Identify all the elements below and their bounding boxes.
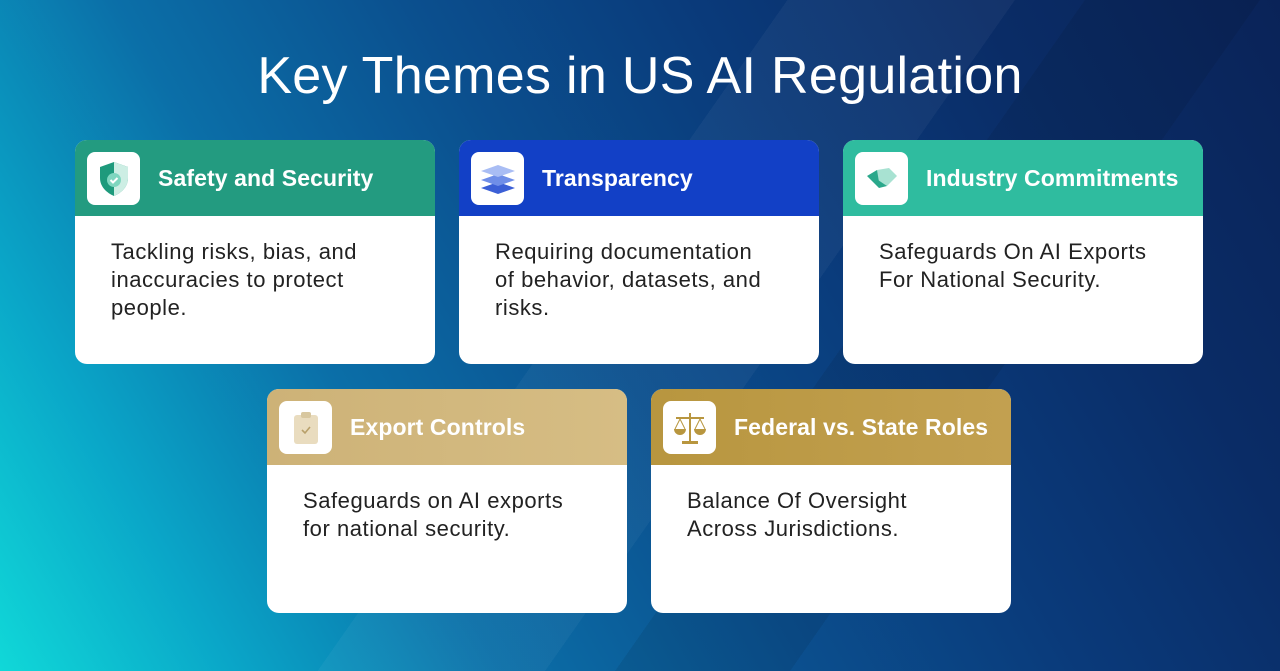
header: federal (651, 389, 1011, 465)
header: safety: Safety and Security (158, 165, 373, 191)
panel: industry commitments (843, 140, 1203, 364)
panel: safety and security (75, 140, 435, 364)
panel: federal vs state (651, 389, 1011, 613)
header: industry: Industry Commitments (926, 165, 1178, 191)
header: export: Export Controls (350, 414, 525, 440)
header: transparency: Transparency (542, 165, 693, 191)
header: transparency (459, 140, 819, 216)
text: industry: Safeguards On AI Exports For National Security. (879, 239, 1147, 292)
text: export: Safeguards on AI exports for national security. (303, 488, 563, 541)
title: Key Themes in US AI Regulation (257, 47, 1023, 105)
header: federal: Federal vs. State Roles (734, 414, 988, 440)
panel: export controls (267, 389, 627, 613)
panel: transparency (459, 140, 819, 364)
text: safety: Tackling risks, bias, and inaccuracies to protect people. (111, 239, 357, 320)
header: industry (843, 140, 1203, 216)
header: export (267, 389, 627, 465)
text: federal: Balance Of Oversight Across Jurisdictions. (687, 488, 907, 541)
header: safety (75, 140, 435, 216)
text: transparency: Requiring documentation of behavior, datasets, and risks. (495, 239, 761, 320)
